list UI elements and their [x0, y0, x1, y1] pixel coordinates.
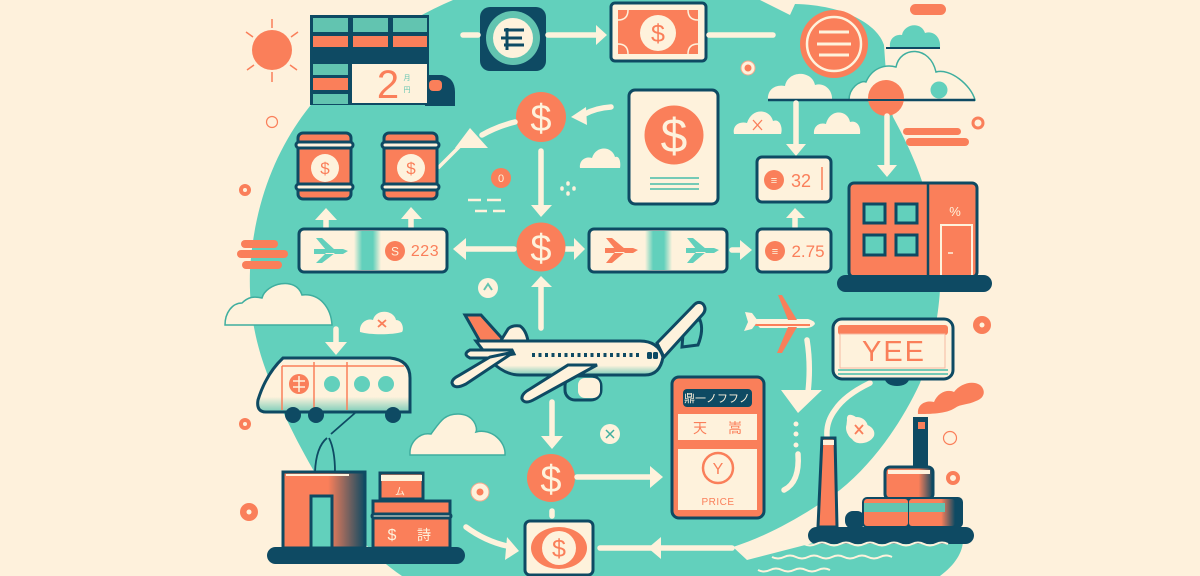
dollar circle: top: $ [530, 98, 552, 140]
arrows: strip up to drums [315, 207, 422, 228]
arrow: coin to bill [463, 25, 607, 45]
decorative flowers [239, 418, 620, 521]
boarding strip: 223 [299, 229, 447, 272]
water waves [758, 542, 948, 572]
arrow: up into central dollar [531, 276, 552, 328]
fare table panel: 円 [404, 86, 410, 94]
arrow: up to 32 tag [786, 208, 805, 227]
dollar circle: central: $ [530, 228, 552, 270]
arrow: bottom leftward [600, 537, 732, 559]
icon: bank note: $ [651, 20, 665, 48]
arrow: document to top dollar [571, 107, 611, 125]
icon: sun [246, 19, 298, 82]
dollar circle: lower [527, 454, 575, 502]
boarding strip: two planes [589, 229, 727, 272]
icon: fuel drum right [382, 133, 439, 199]
bottom bank note: $ [552, 535, 566, 563]
sign: YEE [833, 319, 953, 386]
small cloud with cross [360, 312, 403, 334]
boarding strip: 223: 223 [411, 243, 439, 260]
icon: coin badge [480, 7, 546, 71]
bottom bank note [525, 521, 593, 575]
shop building [267, 472, 465, 564]
connector: sign to factory [827, 383, 870, 436]
price card: 天 [693, 420, 707, 436]
dollar circle: top [516, 92, 566, 142]
factory [808, 417, 974, 544]
price card [672, 377, 764, 518]
shop building: 詩 [417, 527, 431, 543]
fare table panel [310, 15, 455, 107]
cloud with cross [846, 415, 874, 443]
boarding strip: 223: S [391, 244, 399, 258]
icon: dollar document: $ [661, 110, 687, 163]
dollar circle: central [516, 222, 566, 272]
decorative pill [910, 4, 946, 15]
shop building: $ [388, 527, 397, 544]
small clouds [580, 112, 860, 168]
dollar circle: lower: $ [540, 459, 562, 501]
cloud shelf [768, 51, 975, 116]
left cloud [225, 283, 332, 325]
price card: 嵩 [728, 420, 742, 436]
center cloud [410, 414, 505, 455]
icon: building [837, 183, 992, 292]
arrow: cloud to train [325, 329, 347, 355]
icon: dollar document [629, 90, 718, 204]
arrow: shop to bottom note [466, 527, 519, 560]
arrows: central dollar sideways [453, 238, 585, 260]
small center marks [468, 168, 574, 211]
fare table panel: 2 [377, 63, 399, 107]
arrow: lower dollar to price card [577, 466, 663, 488]
right decorative bars [903, 118, 983, 146]
connector: dollar to bill [549, 511, 555, 516]
decorative left marks [237, 61, 755, 269]
small center flower [478, 278, 498, 298]
shop building: ム [395, 486, 405, 498]
icon: train [258, 358, 410, 423]
hanging hook line [315, 413, 355, 472]
main airplane [452, 302, 705, 402]
arrow: cloud to building [877, 116, 897, 177]
curved arrow: small plane downward [781, 340, 822, 490]
icon: fuel drum right: $ [406, 159, 416, 178]
icon: bank note [611, 3, 706, 61]
price card: Y [713, 461, 724, 478]
fare tag: 32: ≡ [771, 175, 777, 187]
fare tag: 2.75: ≡ [772, 246, 778, 258]
teal background blob [250, 0, 963, 576]
arrow: top dollar down to central dollar [531, 151, 552, 217]
decorative rings right [944, 432, 958, 483]
fare table panel: 月 [404, 74, 410, 82]
icon: fuel drum left [296, 133, 353, 199]
arrow: boarding strip to 2.75 [732, 240, 752, 260]
small center marks: 0 [498, 173, 504, 185]
icon: building: % [949, 204, 961, 219]
fare tag: 2.75: 2.75 [791, 242, 825, 261]
price card: PRICE [701, 497, 735, 508]
fare flower right [973, 316, 991, 334]
fare tag: 32: 32 [791, 171, 811, 191]
arrow: dollar to fuel drum [438, 122, 515, 168]
fare tag: 2.75 [757, 229, 831, 272]
arrow: plane to dollar [541, 402, 563, 449]
icon: menu circle [800, 10, 868, 78]
arrow: clouds to 32 fare [786, 103, 806, 156]
icon: fuel drum left: $ [320, 159, 330, 178]
connector line [709, 32, 773, 38]
small airplane [744, 295, 815, 353]
fare tag: 32 [757, 157, 831, 202]
teal cloud [886, 25, 940, 48]
price card: 鼎一ノフフノ [684, 392, 750, 405]
coral cloud [918, 383, 984, 414]
sign: YEE: YEE [862, 336, 926, 368]
